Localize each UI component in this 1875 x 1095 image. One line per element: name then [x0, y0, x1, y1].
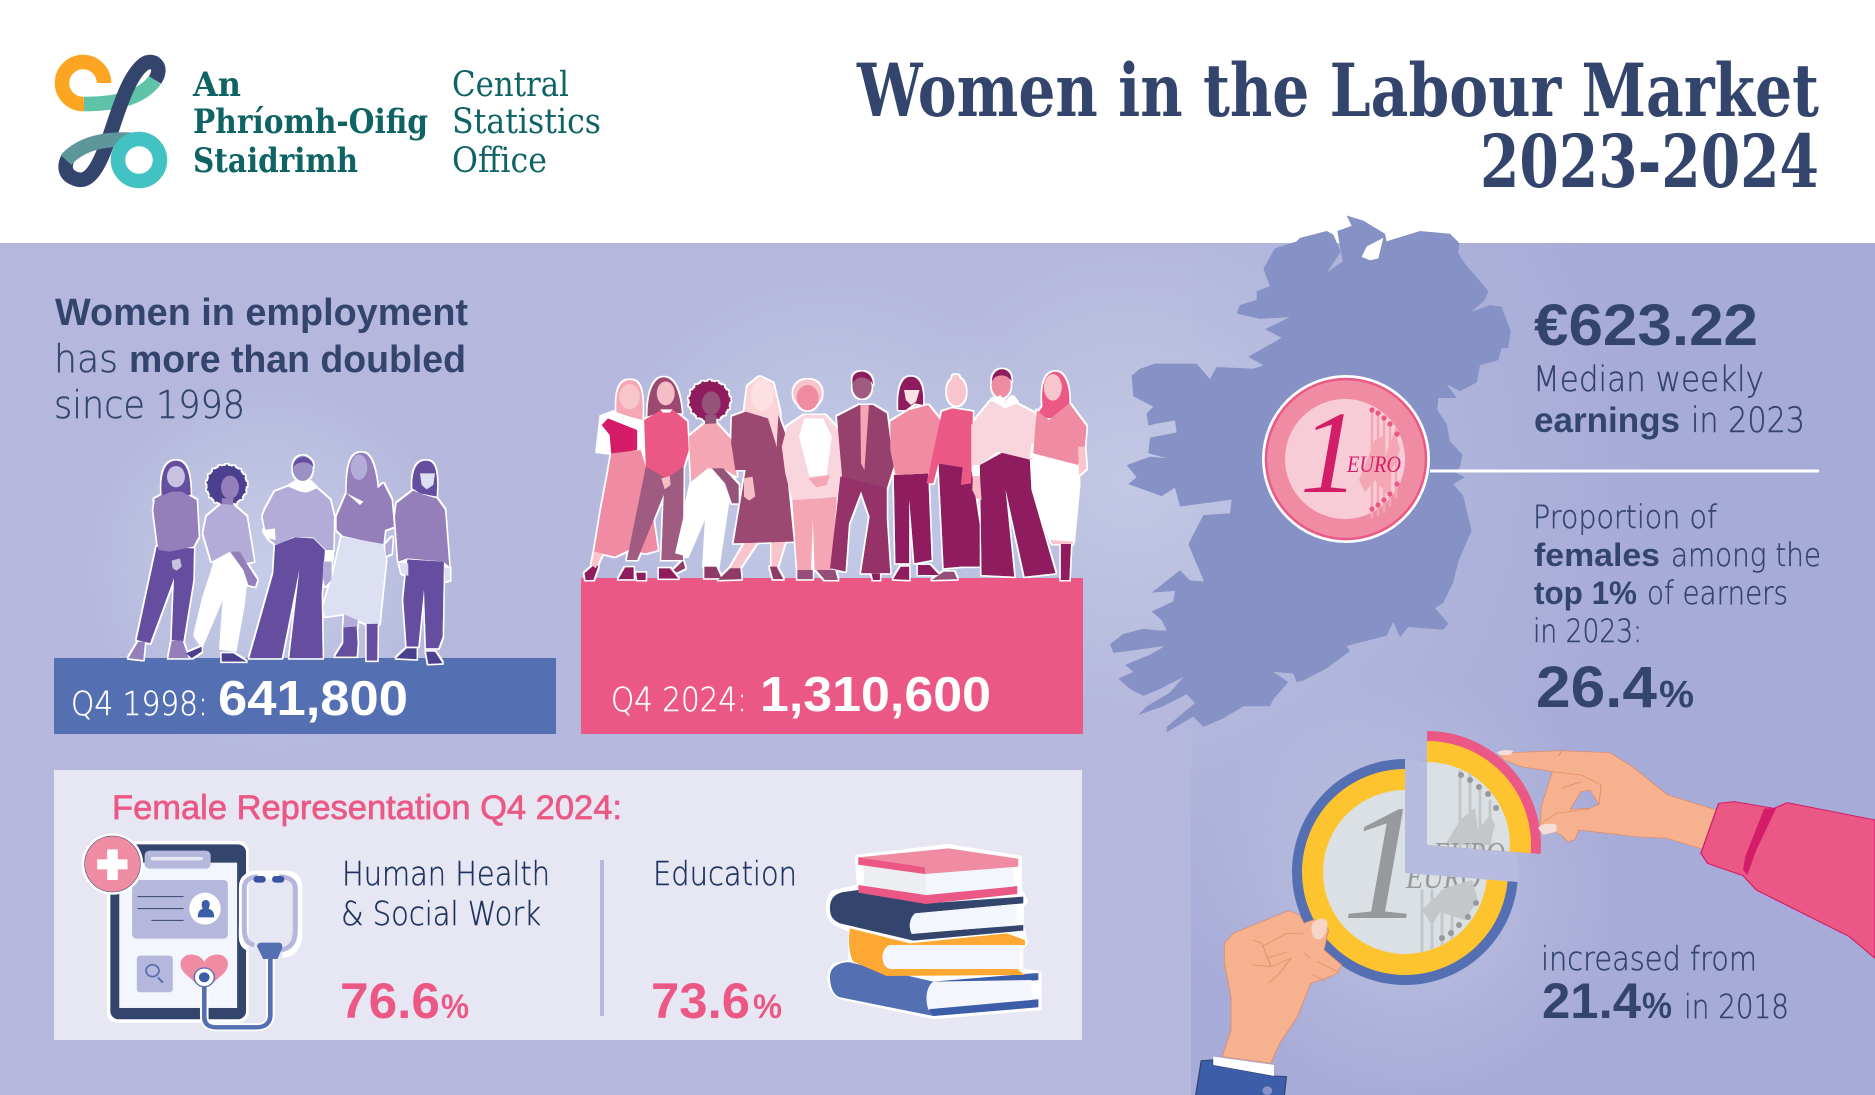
bar: Q4 2024: 1,310,600 [760, 668, 991, 722]
stat: top 1% earners: 26.4 [1536, 655, 1657, 720]
illustration: right hand with pink sleeve [1497, 750, 1875, 958]
value: 76.6%: % [441, 988, 469, 1026]
logo English name: Statistics [452, 102, 601, 142]
value: 76.6%: 76.6 [340, 973, 440, 1029]
coin icon: 1 euro pink: 1 [1300, 387, 1359, 518]
women group 2024 [584, 369, 1087, 580]
stat: increased from 21.4%: % [1642, 985, 1672, 1026]
stat: median weekly earnings: earnings [1534, 401, 1680, 440]
stat: top 1% earners [1533, 498, 1821, 720]
right panel background [1191, 243, 1875, 1095]
logo Irish name: Staidrimh [193, 141, 358, 181]
illustration: euro coin with missing slice: 1 [1342, 771, 1424, 954]
logo Irish name [192, 65, 428, 181]
glow behind map [890, 243, 1191, 723]
heading: women in employment: more than doubled [129, 339, 466, 381]
bar: Q4 1998 [54, 658, 556, 734]
title [856, 48, 1819, 205]
illustration: coin slice: EURO [1432, 836, 1505, 873]
value: 73.6%: % [753, 988, 782, 1026]
bar: Q4 2024 [581, 578, 1083, 734]
stat: top 1% earners: females [1534, 537, 1660, 573]
label: education: Education [653, 854, 797, 893]
stat: top 1% earners: of earners [1647, 574, 1788, 612]
glow behind 1998 group [80, 380, 460, 760]
heading: women in employment [54, 292, 468, 427]
coin icon: 1 euro pink: EURO [1346, 452, 1401, 477]
logo Irish name: An [192, 65, 241, 105]
illustration: coin slice [1427, 731, 1541, 854]
divider line [1430, 470, 1819, 472]
heading: women in employment: Women in employment [55, 292, 468, 334]
illustration: euro coin with missing slice [1292, 759, 1518, 985]
stat: increased from 21.4%: 21.4 [1542, 973, 1641, 1029]
glow behind 2024 group [590, 270, 1070, 750]
bar: Q4 1998: 641,800 [218, 672, 408, 726]
women group 1998 [128, 453, 450, 664]
background band [0, 243, 1875, 1095]
stat: median weekly earnings: Median weekly [1533, 360, 1764, 400]
bar: Q4 2024: Q4 2024: [611, 680, 747, 719]
panel: female representation [54, 770, 1082, 1040]
heading: women in employment: has [54, 337, 118, 381]
label: human health [341, 854, 550, 933]
logo English name: Office [452, 141, 547, 181]
illustration: left hand with blue cuff [1196, 911, 1342, 1095]
illustration: euro coin with missing slice: EURO [1405, 859, 1481, 896]
stat: increased from 21.4%: in 2018 [1684, 987, 1789, 1026]
label: human health: Human Health [342, 854, 550, 893]
icon: stack of books [826, 844, 1042, 1019]
stat: increased from 21.4%: increased from [1541, 939, 1757, 978]
logo English name: Central [452, 65, 569, 105]
stat: top 1% earners: in 2023: [1533, 612, 1642, 650]
stat: top 1% earners: among the [1671, 536, 1821, 574]
stat: top 1% earners: Proportion of [1533, 498, 1718, 536]
stat: median weekly earnings [1533, 293, 1805, 441]
logo Irish name: Phríomh-Oifig [193, 102, 428, 142]
stat: increased from 21.4% [1541, 939, 1789, 1029]
label: human health: & Social Work [341, 894, 541, 933]
coin icon: 1 euro pink [1262, 375, 1430, 543]
stat: median weekly earnings: €623.22 [1534, 293, 1758, 358]
heading: women in employment: since 1998 [54, 383, 245, 427]
icon: clipboard and stethoscope [82, 833, 298, 1027]
glow behind coin [1195, 675, 1625, 1095]
stat: top 1% earners: top 1% [1534, 575, 1637, 611]
stat: top 1% earners: % [1659, 674, 1694, 716]
map of Ireland [1110, 215, 1511, 732]
panel heading: Female Representation Q4 2024: [112, 789, 622, 827]
logo English name [452, 65, 601, 181]
logo icon [62, 62, 160, 181]
value: 73.6%: 73.6 [651, 973, 750, 1029]
bar: Q4 1998: Q4 1998: [71, 684, 208, 723]
stat: median weekly earnings: in 2023 [1691, 401, 1805, 441]
